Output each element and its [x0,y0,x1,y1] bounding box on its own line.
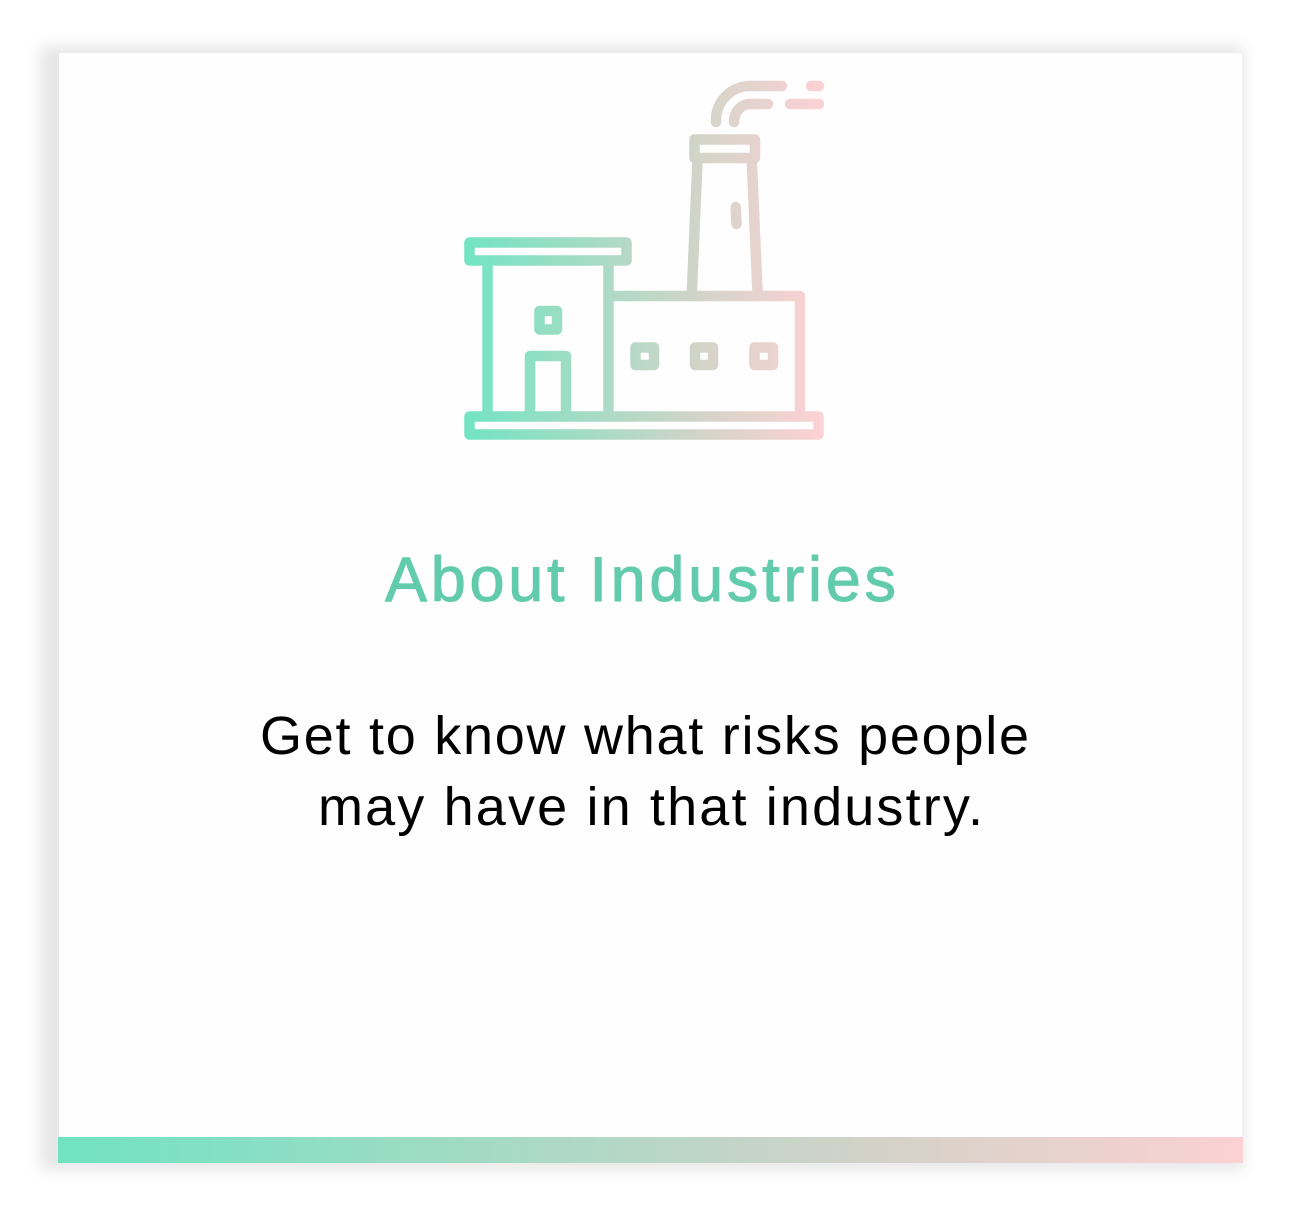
title: About Industries [385,545,896,615]
body text: Get to know what risks people [260,706,1029,766]
body text [260,706,1029,837]
gradient footer bar [58,1137,1243,1163]
icon: factory [470,86,819,434]
body text: may have in that industry. [318,777,983,837]
